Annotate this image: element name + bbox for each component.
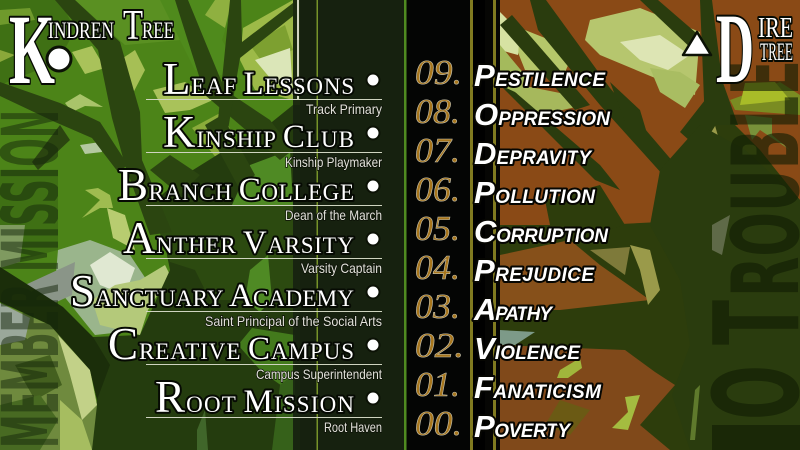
background: brown dire forest xyxy=(500,0,800,450)
rank: Sanctuary Academy: SANCTUARY ACADEMY xyxy=(70,266,354,316)
item 02: VIOLENCE xyxy=(474,331,581,366)
heading: Kindren Tree: T xyxy=(123,3,143,49)
rank: Kinship Club: KINSHIP CLUB xyxy=(163,107,354,157)
item 06: POLLUTION xyxy=(474,175,596,210)
rank: Root Mission: ROOT MISSION xyxy=(155,372,354,422)
list: numbered dire afflictions xyxy=(415,53,611,444)
item 00: POVERTY xyxy=(474,409,572,444)
item 06 xyxy=(415,170,596,210)
item 07: DEPRAVITY xyxy=(474,136,593,171)
item 05: 05. xyxy=(415,209,460,248)
rank: Creative Campus: CREATIVE CAMPUS xyxy=(108,319,354,369)
rank: Anther Varsity: Varsity Captain xyxy=(301,260,382,276)
rank: Kinship Club xyxy=(146,107,382,170)
heading: Kindren Tree: REE xyxy=(142,18,174,43)
item 05: CORRUPTION xyxy=(474,214,609,249)
item 05 xyxy=(415,209,609,249)
watermark: right vertical lettering xyxy=(710,64,800,450)
lower left pale leaves xyxy=(0,303,97,450)
item 00: 00. xyxy=(415,404,462,443)
rank: Branch College: BRANCH COLLEGE xyxy=(118,160,354,210)
item 02 xyxy=(415,326,581,366)
item 01 xyxy=(415,365,602,405)
item 03: APATHY xyxy=(473,292,554,327)
rank: Kinship Club: Kinship Playmaker xyxy=(285,154,382,170)
item 01: 01. xyxy=(415,365,460,404)
list: kindren ranks xyxy=(70,54,382,435)
item 09: 09. xyxy=(415,53,462,92)
heading: Kindren Tree: INDREN xyxy=(48,18,114,43)
item 08: 08. xyxy=(415,92,460,131)
item 07: 07. xyxy=(415,131,460,170)
rank: Sanctuary Academy: Saint Principal of the Social Arts xyxy=(205,313,382,329)
item 06: 06. xyxy=(415,170,460,209)
rank: Leaf Lessons: Track Primary xyxy=(306,101,382,117)
dark lower region xyxy=(90,105,300,450)
item 09 xyxy=(415,53,606,93)
rank: Root Mission: Root Haven xyxy=(324,419,382,435)
dark central strips xyxy=(293,0,500,450)
rank: Creative Campus: Campus Superintendent xyxy=(256,366,382,382)
rank: Branch College: Dean of the March xyxy=(285,207,382,223)
rank: Root Mission xyxy=(146,372,382,435)
item 04 xyxy=(415,248,595,288)
item 00 xyxy=(415,404,572,444)
item 08 xyxy=(415,92,611,132)
item 02: 02. xyxy=(415,326,464,365)
rank: Leaf Lessons: LEAF LESSONS xyxy=(163,54,354,104)
branches xyxy=(0,0,293,235)
item 09: PESTILENCE xyxy=(474,58,606,93)
heading: Dire Tree xyxy=(683,0,793,104)
item 08: OPPRESSION xyxy=(474,97,611,132)
rank: Anther Varsity: ANTHER VARSITY xyxy=(123,213,354,263)
item 03 xyxy=(415,287,554,327)
rank: Leaf Lessons xyxy=(146,54,382,117)
heading: Kindren Tree xyxy=(9,0,174,105)
item 03: 03. xyxy=(415,287,460,326)
item 04: 04. xyxy=(415,248,460,287)
item 04: PREJUDICE xyxy=(474,253,595,288)
leaf cluster above the arc xyxy=(55,240,150,335)
dire branches xyxy=(500,0,800,450)
background: green kindren forest xyxy=(0,0,300,450)
item 07 xyxy=(415,131,593,171)
item 01: FANATICISM xyxy=(474,370,602,405)
